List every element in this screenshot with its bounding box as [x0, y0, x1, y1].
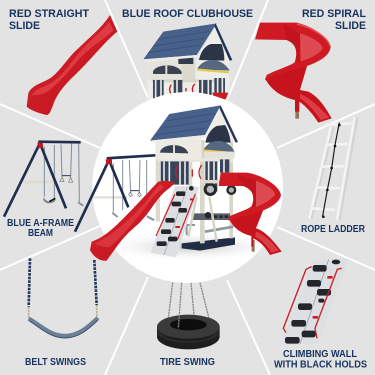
- heading: belt swings: BELT SWINGS: [25, 357, 86, 368]
- heading: climbing wall with black holds: CLIMBING WALL: [283, 348, 358, 360]
- icon: climbing wall: [280, 258, 348, 345]
- heading: red straight slide: [9, 8, 89, 32]
- heading: red spiral slide: [302, 8, 366, 32]
- center circle: [92, 92, 283, 283]
- illustration: full playset: [75, 105, 283, 262]
- panel: tire swing: [157, 283, 220, 368]
- icon: clubhouse: [143, 23, 232, 100]
- heading: blue a-frame beam: [7, 218, 74, 239]
- panel: blue roof clubhouse: [122, 8, 253, 100]
- heading: tire swing: TIRE SWING: [160, 357, 215, 368]
- icon: red straight slide: [27, 15, 117, 115]
- swing beam set: [75, 155, 155, 232]
- panel: red spiral slide: [255, 8, 366, 123]
- center climbing wall: [151, 186, 199, 257]
- heading: red straight slide: RED STRAIGHT: [9, 8, 89, 20]
- panel: belt swings: [25, 258, 98, 368]
- heading: climbing wall with black holds: [274, 348, 367, 370]
- icon: a-frame swing set: [4, 142, 84, 217]
- panel: rope ladder: [301, 117, 366, 235]
- icon: tire swing: [157, 283, 220, 349]
- heading: red spiral slide: RED SPIRAL: [302, 8, 366, 20]
- icon: belt swing: [29, 258, 98, 338]
- center spiral slide: [219, 173, 282, 255]
- heading: red straight slide: SLIDE: [9, 20, 40, 32]
- panel: climbing wall: [274, 258, 367, 370]
- center straight slide: [90, 181, 175, 261]
- heading: blue a-frame beam: BLUE A-FRAME: [7, 218, 74, 229]
- heading: blue a-frame beam: BEAM: [28, 228, 53, 239]
- panel: red straight slide: [9, 8, 117, 115]
- panel: blue a-frame beam: [4, 142, 84, 239]
- heading: red spiral slide: SLIDE: [335, 20, 366, 32]
- clubhouse: [150, 105, 238, 251]
- heading: blue roof clubhouse: BLUE ROOF CLUBHOUSE: [122, 8, 253, 20]
- heading: rope ladder: ROPE LADDER: [301, 224, 366, 235]
- ground shadow: [97, 232, 283, 262]
- icon: red spiral slide: [255, 23, 332, 123]
- icon: rope ladder: [309, 117, 356, 220]
